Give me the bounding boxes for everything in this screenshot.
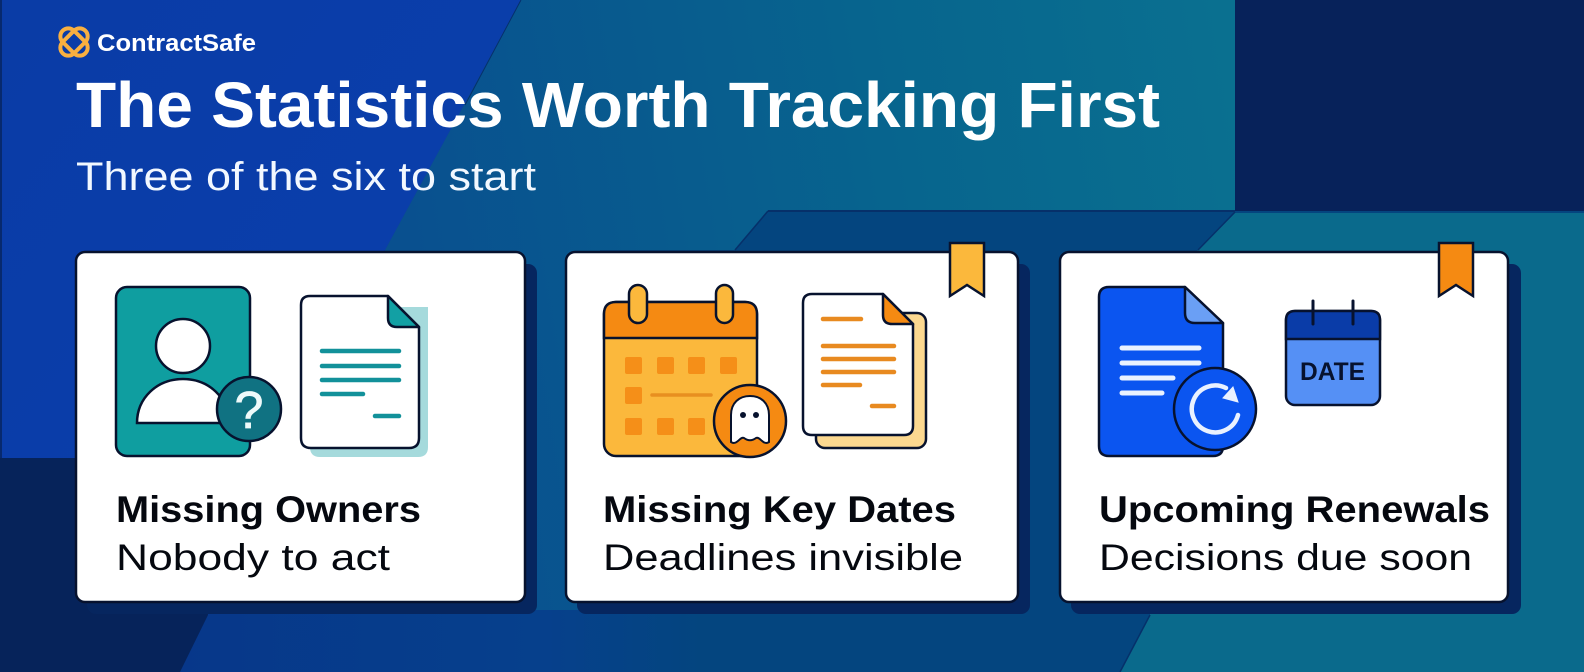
logo wordmark: ContractSafe bbox=[97, 30, 256, 57]
card text: Nobody to act bbox=[116, 537, 391, 578]
panel: upcoming renewals bbox=[1060, 243, 1521, 614]
logo bbox=[57, 25, 256, 59]
card text: Deadlines invisible bbox=[603, 537, 963, 578]
icon: calendar with ghost bbox=[604, 285, 786, 457]
icon: date calendar bbox=[1286, 301, 1380, 405]
icon: bookmark yellow bbox=[950, 243, 984, 296]
card heading: Upcoming Renewals bbox=[1099, 489, 1490, 530]
title: The Statistics Worth Tracking First bbox=[76, 69, 1160, 141]
icon: document with renewal arrow bbox=[1099, 287, 1256, 456]
icon: person with question mark bbox=[116, 287, 281, 456]
panel: missing owners bbox=[76, 252, 537, 614]
panel: missing key dates bbox=[566, 243, 1030, 614]
card text: Decisions due soon bbox=[1099, 537, 1472, 578]
icon: document bbox=[301, 296, 428, 457]
icon: stacked documents bbox=[803, 294, 926, 448]
subtitle: Three of the six to start bbox=[76, 155, 536, 199]
icon: logo mark bbox=[57, 25, 91, 59]
card heading: Missing Key Dates bbox=[603, 489, 956, 530]
card heading: Missing Owners bbox=[116, 489, 421, 530]
icon: person with question mark: ? bbox=[235, 382, 263, 440]
icon: date calendar: DATE bbox=[1300, 358, 1365, 386]
icon: bookmark orange bbox=[1439, 243, 1473, 296]
